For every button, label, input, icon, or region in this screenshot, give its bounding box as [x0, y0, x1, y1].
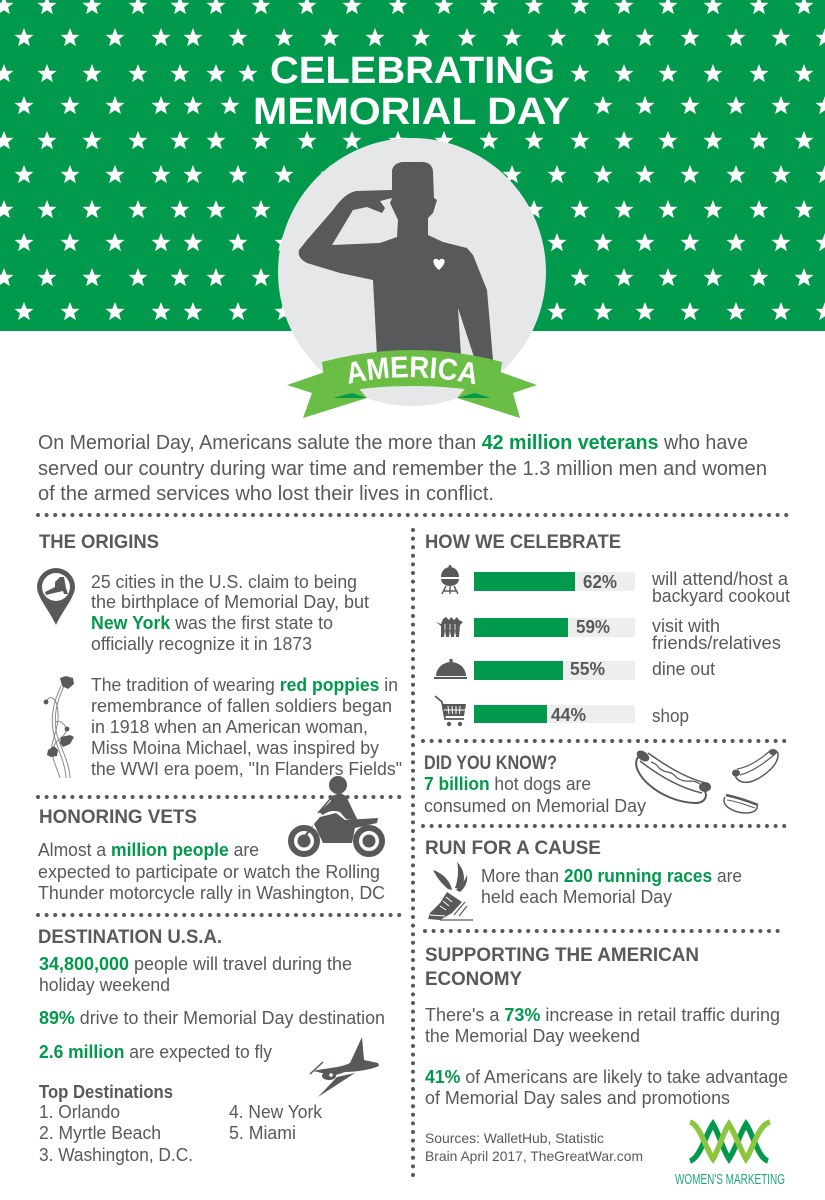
- text: hot dogs: 7 billion hot dogs are: [424, 774, 591, 794]
- text: travel statistics: 34,800,000 people will travel during the: [39, 954, 352, 974]
- heading: honoring vets: HONORING VETS: [39, 807, 197, 828]
- bar: shop 44%: [474, 705, 635, 725]
- text: New York: New York was the first state to: [91, 613, 333, 633]
- text: New York: [91, 572, 369, 654]
- list: top destinations: 3. Washington, D.C.: [39, 1145, 193, 1165]
- icon: saluting soldier medallion: [278, 138, 546, 406]
- intro text block: served our country during war time and remember the 1.3 million men and women: [38, 458, 767, 480]
- text: red poppies: [91, 675, 402, 779]
- label: backyard cookout: [651, 569, 790, 606]
- list: top destinations: 2. Myrtle Beach: [39, 1123, 161, 1143]
- bar: friends/relatives 59%: 59%: [576, 617, 610, 637]
- text: sales and promotions: of Memorial Day sales and promotions: [425, 1088, 730, 1108]
- intro text block: On Memorial Day, Americans salute the more than 42 million veterans who have: [38, 432, 748, 454]
- heading: destination USA: DESTINATION U.S.A.: [38, 927, 222, 948]
- text: red poppies: the WWI era poem, "In Flanders Fields": [91, 759, 402, 779]
- text: red poppies: The tradition of wearing red poppies in: [91, 675, 398, 695]
- text: travel statistics: holiday weekend: [39, 975, 170, 995]
- heading: supporting the American economy: SUPPORTING THE AMERICAN: [425, 945, 699, 966]
- title: [253, 50, 570, 133]
- label: friends/relatives: friends/relatives: [652, 633, 781, 653]
- text: New York: 25 cities in the U.S. claim to being: [91, 572, 357, 592]
- text: running races: [481, 866, 742, 907]
- text: red poppies: in 1918 when an American woman,: [91, 717, 368, 737]
- list: top destinations: [39, 1082, 323, 1165]
- text: running races: held each Memorial Day: [481, 887, 672, 907]
- text: New York: the birthplace of Memorial Day, but: [91, 592, 369, 612]
- text: red poppies: Miss Moina Michael, was inspired by: [91, 738, 379, 758]
- heading: supporting the American economy: [425, 945, 699, 990]
- text: rolling thunder: [38, 840, 385, 903]
- icon: dining cloche: [434, 659, 467, 679]
- text: sales and promotions: 41% of Americans are likely to take advantage: [425, 1067, 788, 1087]
- intro text block: of the armed services who lost their lives in conflict.: [38, 483, 494, 505]
- logo: Women's Marketing: [675, 1122, 785, 1188]
- text: travel statistics: 2.6 million are expected to fly: [39, 1042, 272, 1062]
- text: travel statistics: 89% drive to their Memorial Day destination: [39, 1008, 385, 1028]
- list: top destinations: Top Destinations: [39, 1082, 173, 1102]
- text: running races: More than 200 running races are: [481, 866, 742, 886]
- heading: how we celebrate: HOW WE CELEBRATE: [425, 532, 621, 553]
- bar: backyard cookout 62%: [474, 572, 635, 592]
- intro text block: [38, 432, 767, 505]
- title: CELEBRATING: [270, 50, 555, 92]
- list: top destinations: 1. Orlando: [39, 1102, 120, 1122]
- heading: supporting the American economy: ECONOMY: [425, 969, 522, 990]
- text: sources: Brain April 2017, TheGreatWar.com: [425, 1148, 643, 1164]
- icon: small hot dog lower: [724, 795, 758, 813]
- panel: honoring vets: [38, 776, 385, 903]
- text: sales and promotions: [425, 1067, 788, 1108]
- label: shop: shop: [652, 706, 689, 726]
- ribbon: America banner: [287, 350, 537, 418]
- icon: New York map pin: [37, 568, 75, 625]
- title: MEMORIAL DAY: [253, 91, 570, 133]
- panel: destination USA: [38, 927, 385, 1165]
- heading: did you know: DID YOU KNOW?: [424, 753, 557, 774]
- icon: shopping cart: [435, 696, 466, 726]
- text: red poppies: remembrance of fallen soldiers began: [91, 696, 392, 716]
- label: backyard cookout: backyard cookout: [652, 586, 790, 606]
- text: hot dogs: consumed on Memorial Day: [424, 796, 646, 816]
- text: rolling thunder: expected to participate or watch the Rolling: [38, 862, 380, 882]
- text: rolling thunder: Almost a million people are: [38, 840, 259, 860]
- icon: friends group: [436, 617, 463, 637]
- label: dine out: dine out: [652, 659, 715, 679]
- icon: motorcycle: [291, 776, 382, 854]
- icon: airplane: [310, 1037, 379, 1097]
- text: New York: officially recognize it in 1873: [91, 634, 312, 654]
- icon: small hot dog upper right: [732, 749, 778, 782]
- bar: friends/relatives 59%: [474, 617, 635, 637]
- label: backyard cookout: will attend/host a: [651, 569, 789, 589]
- text: retail traffic: There's a 73% increase in retail traffic during: [425, 1005, 780, 1025]
- panel: green star banner: [0, 0, 825, 331]
- icon: poppies: [44, 676, 74, 778]
- label: friends/relatives: [652, 616, 781, 653]
- text: sources: [425, 1130, 643, 1164]
- heading: run for a cause: RUN FOR A CAUSE: [425, 838, 601, 859]
- icon: winged running shoe: [428, 862, 473, 920]
- icon: large hot dog: [635, 748, 711, 803]
- text: travel statistics: [39, 954, 385, 1062]
- bar: backyard cookout 62%: 62%: [583, 572, 617, 592]
- panel: run for a cause: [425, 838, 742, 920]
- bar: dine out 55%: [474, 659, 635, 680]
- list: top destinations: 4. New York: [229, 1102, 323, 1122]
- panel: how we celebrate: [425, 532, 790, 726]
- bar: shop 44%: 44%: [551, 705, 586, 725]
- text: retail traffic: [425, 1005, 780, 1046]
- ribbon: America banner: AMERICA: [348, 356, 476, 384]
- text: rolling thunder: Thunder motorcycle rally in Washington, DC: [38, 883, 385, 903]
- list: top destinations: 5. Miami: [229, 1123, 296, 1143]
- label: friends/relatives: visit with: [652, 616, 720, 636]
- text: hot dogs: [424, 774, 646, 816]
- text: sources: Sources: WalletHub, Statistic: [425, 1130, 604, 1146]
- panel: supporting the American economy: [425, 945, 788, 1108]
- heading: the origins: THE ORIGINS: [39, 532, 159, 553]
- icon: grill: [441, 565, 459, 594]
- text: retail traffic: the Memorial Day weekend: [425, 1026, 640, 1046]
- panel: did you know: [424, 748, 778, 816]
- bar: dine out 55%: 55%: [570, 659, 605, 679]
- panel: the origins: [37, 532, 402, 779]
